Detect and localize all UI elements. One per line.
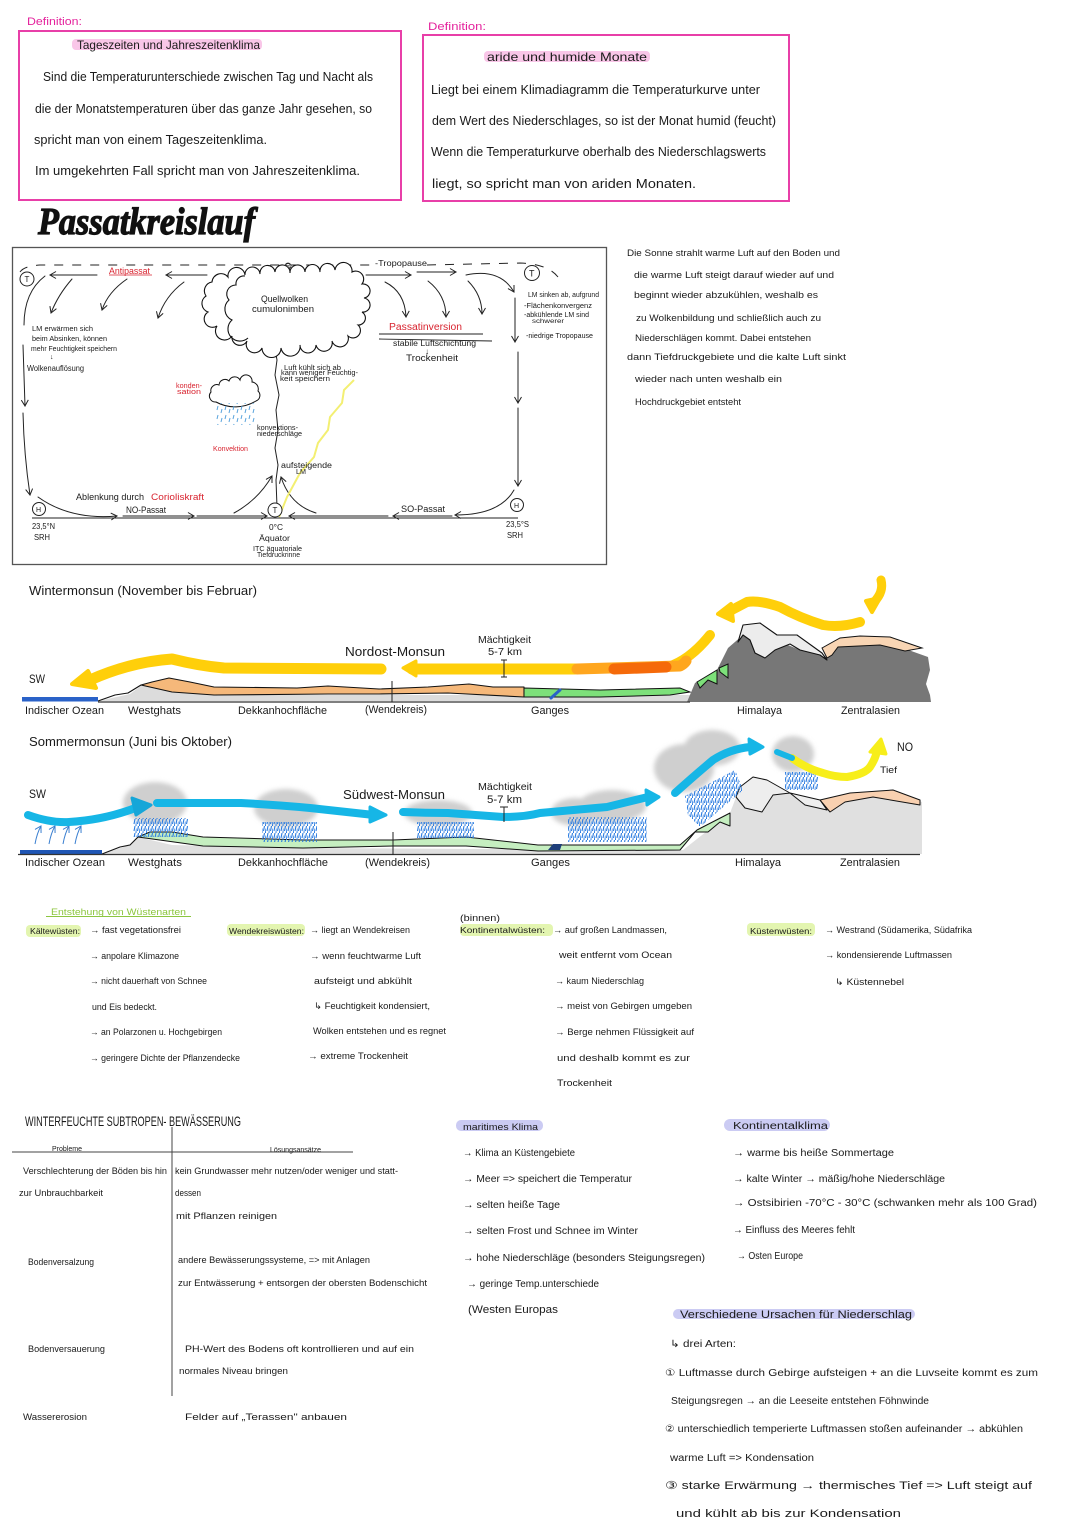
labels: winter places xyxy=(25,704,900,717)
arrow: summer flow centre xyxy=(157,803,386,822)
column: Kontinentalwüsten: → kaum Niederschlag xyxy=(555,976,644,986)
row: Verschlechterung der Böden: Verschlechterung der Böden bis hin xyxy=(23,1166,167,1176)
icon: cumulonimbus cloud: cumulonimben xyxy=(252,304,314,314)
list: maritimes Klima: → selten heiße Tage xyxy=(463,1200,560,1211)
text block: explanation of trade wind circulation: zu Wolkenbildung und schließlich auch zu xyxy=(636,313,821,323)
panel: causes of precipitation xyxy=(665,1309,1038,1520)
row: Bodenversalzung: zur Entwässerung + entsorgen der obersten Bodenschicht xyxy=(178,1278,428,1288)
column: Kältewüsten: → fast vegetationsfrei xyxy=(90,925,181,935)
terrain: Himalaya dark mountains xyxy=(687,623,931,702)
label: Ablenkung durch Corioliskraft: Ablenkung durch xyxy=(76,492,144,502)
label: Mächtigkeit 5-7 km: Mächtigkeit xyxy=(478,782,532,793)
text block: definition right body: dem Wert des Niederschlages, so ist der Monat humid (feucht) xyxy=(432,113,776,128)
title: Passatkreislauf: Passatkreislauf xyxy=(37,201,258,243)
row: Wassererosion: Felder auf „Terassen" anbauen xyxy=(185,1412,347,1422)
text block: explanation of trade wind circulation: Niederschlägen kommt. Dabei entstehen xyxy=(635,333,811,343)
arrows: upper air flow xyxy=(50,272,514,318)
panel: Passatkreislauf diagram xyxy=(12,248,606,564)
label: Äquator: ITC äquatoriale xyxy=(253,546,302,553)
row: Bodenversauerung: PH-Wert des Bodens oft kontrollieren und auf ein xyxy=(185,1344,414,1354)
column headers xyxy=(52,1146,321,1154)
column: Kältewüsten: → an Polarzonen u. Hochgebirgen xyxy=(90,1027,222,1037)
label: Mächtigkeit 5-7 km: 5-7 km xyxy=(488,647,522,658)
terrain: lowland xyxy=(98,678,690,701)
label: Konvektionsniederschläge: konvektions- xyxy=(257,425,299,432)
label: Passatinversion block: Passatinversion xyxy=(389,322,462,333)
list: maritimes Klima: → geringe Temp.unterschiede xyxy=(467,1279,599,1290)
circle T centre: T xyxy=(272,506,278,515)
row: Bodenversalzung xyxy=(28,1255,428,1288)
label: Tropopause: -Tropopause xyxy=(375,259,428,268)
arrows: trade winds at surface xyxy=(38,476,514,517)
label: Kondensation: sation xyxy=(177,389,201,396)
panel: Wintermonsun diagram xyxy=(22,580,931,717)
label: Mächtigkeit 5-7 km xyxy=(478,635,531,677)
text: left air mass note: Wolkenauflösung xyxy=(27,364,84,373)
text: right air mass note: -abkühlende LM sind xyxy=(524,312,589,319)
highlight heading: aride und humide Monate: aride und humide Monate xyxy=(487,50,647,64)
small up arrows from ocean xyxy=(35,826,81,844)
marker: R at top of cloud: R xyxy=(286,264,291,270)
label: Ablenkung durch Corioliskraft: Corioliskraft xyxy=(151,492,205,502)
row: Bodenversauerung xyxy=(28,1344,414,1376)
column: Wendekreiswüsten: → wenn feuchtwarme Luft xyxy=(310,951,422,961)
tick: Wendekreis xyxy=(391,681,393,702)
label: Antipassat: Antipassat xyxy=(109,266,150,276)
list: maritimes Klima: → Klima an Küstengebiete xyxy=(463,1148,575,1159)
column: Kontinentalwüsten: weit entfernt vom Ocean xyxy=(558,950,672,960)
text: right air mass note: -Flächenkonvergenz xyxy=(524,303,593,310)
panel: maritimes Klima xyxy=(456,1120,705,1316)
item 1: Steigungsregen → an die Leeseite entstehen Föhnwinde xyxy=(671,1396,929,1407)
column: Wendekreiswüsten xyxy=(227,924,446,1061)
arrow: upper yellow flow xyxy=(718,580,882,626)
text block: explanation of trade wind circulation xyxy=(627,248,847,407)
heading: Entstehung von Wüstenarten: Entstehung von Wüstenarten xyxy=(51,907,186,917)
row: Bodenversalzung: andere Bewässerungssysteme, => mit Anlagen xyxy=(178,1255,370,1265)
list: Kontinentalklima: → warme bis heiße Sommertage xyxy=(733,1148,894,1159)
text: cooling air note xyxy=(280,365,359,383)
arrow: wavy rising air column xyxy=(275,349,279,507)
item 2 xyxy=(665,1424,1023,1464)
column: Kontinentalwüsten: → Berge nehmen Flüssigkeit auf xyxy=(555,1027,695,1037)
text block: definition left body: Sind die Temperaturunterschiede zwischen Tag und Nacht als xyxy=(43,69,373,84)
label: Mächtigkeit 5-7 km: 5-7 km xyxy=(487,794,522,806)
column: Kontinentalwüsten xyxy=(460,913,695,1088)
terrain: lowland and mountains xyxy=(102,777,922,854)
label: Mächtigkeit 5-7 km xyxy=(478,782,532,822)
label: Äquator: Äquator xyxy=(259,534,290,543)
tropopause dashed line xyxy=(20,263,558,277)
text: right air mass note: LM sinken ab, aufgrund xyxy=(528,292,599,299)
rain streaks xyxy=(133,770,818,842)
column: Kältewüsten: Kältewüsten: xyxy=(30,927,80,936)
labels: winter places: Himalaya xyxy=(737,705,783,717)
label: 23,5 S SRH xyxy=(506,520,529,540)
table rules xyxy=(12,1127,353,1396)
arrow: yellow monsoon to west xyxy=(72,659,381,688)
label: SW: SW xyxy=(29,672,46,686)
row: Bodenversalzung: Bodenversalzung xyxy=(28,1257,94,1267)
list: maritimes Klima: → Meer => speichert die Temperatur xyxy=(463,1174,633,1185)
ground line xyxy=(18,854,920,856)
ground line xyxy=(98,701,690,703)
circle H right xyxy=(510,498,524,512)
labels: summer places: Zentralasien xyxy=(840,857,900,869)
column: Küstenwüsten: → kondensierende Luftmassen xyxy=(825,950,952,960)
row: Verschlechterung der Böden: dessen xyxy=(175,1188,201,1198)
label: Passatinversion block: Trockenheit xyxy=(406,353,459,363)
icon: small rain cloud xyxy=(209,375,260,425)
heading: Sommermonsun: Sommermonsun (Juni bis Oktober) xyxy=(29,734,232,749)
labels: summer places xyxy=(25,857,900,869)
item 3 xyxy=(665,1480,1033,1520)
labels: summer places: Ganges xyxy=(531,857,571,869)
column: Wendekreiswüsten: → extreme Trockenheit xyxy=(308,1051,409,1061)
label: 23,5 S SRH: 23,5°S xyxy=(506,520,529,529)
column headers: Probleme xyxy=(52,1146,82,1153)
label: SW: SW xyxy=(29,787,47,801)
row: Bodenversauerung: normales Niveau bringen xyxy=(179,1366,288,1376)
text block: definition right body: Liegt bei einem Klimadiagramm die Temperaturkurve unter xyxy=(431,82,761,97)
arrows: descending air left xyxy=(23,276,45,495)
list: Kontinentalklima: → Ostsibirien -70°C - 30°C (schwanken mehr als 100 Grad) xyxy=(733,1198,1037,1209)
circle H right: H xyxy=(514,503,519,510)
label: 23,5 N SRH: 23,5°N xyxy=(32,522,55,531)
label: Konvektionsniederschläge xyxy=(257,425,302,438)
text block: explanation of trade wind circulation: die warme Luft steigt darauf wieder auf und xyxy=(634,270,834,280)
label: NO: NO xyxy=(897,740,913,754)
label: aufsteigende LM: LM xyxy=(296,469,306,476)
text: left air mass note: beim Absinken, können xyxy=(32,336,107,343)
icon: cumulonimbus cloud: Quellwolken xyxy=(261,294,308,304)
heading: Wintermonsun: Wintermonsun (November bis Februar) xyxy=(29,583,257,598)
label: 23,5 S SRH: SRH xyxy=(507,531,523,540)
panel: Kontinentalklima xyxy=(724,1119,1037,1262)
icons: grey rain clouds xyxy=(123,730,814,827)
text block: definition right body: Wenn die Temperaturkurve oberhalb des Niederschlagswerts xyxy=(431,144,766,159)
label: Passatinversion block: stabile Luftschichtung xyxy=(393,339,476,348)
label: SO-Passat: SO-Passat xyxy=(401,504,446,514)
column: Kontinentalwüsten: Trockenheit xyxy=(557,1078,613,1088)
row: Bodenversauerung: Bodenversauerung xyxy=(28,1344,105,1354)
text block: definition right body xyxy=(431,82,776,191)
column: Küstenwüsten: ↳ Küstennebel xyxy=(835,977,904,987)
panel: desert types xyxy=(26,907,972,1088)
tick: Wendekreis xyxy=(392,832,394,855)
column: Küstenwüsten: Küstenwüsten: xyxy=(750,927,812,936)
text block: definition left body: Im umgekehrten Fall spricht man von Jahreszeitenklima. xyxy=(35,163,360,178)
list: maritimes Klima: (Westen Europas xyxy=(468,1304,559,1316)
label: Kondensation: konden- xyxy=(176,383,203,390)
highlight heading: maritimes Klima: maritimes Klima xyxy=(463,1122,538,1132)
highlight heading: Kontinentalklima: Kontinentalklima xyxy=(733,1121,829,1132)
text: left air mass note: ↓ xyxy=(50,354,54,361)
text block: explanation of trade wind circulation: wieder nach unten weshalb ein xyxy=(634,374,782,384)
label: Südwest-Monsun: Südwest-Monsun xyxy=(343,787,445,802)
item 2: warme Luft => Kondensation xyxy=(669,1453,814,1464)
row: Verschlechterung der Böden: kein Grundwasser mehr nutzen/oder weniger und statt- xyxy=(175,1166,398,1176)
text block: explanation of trade wind circulation: dann Tiefdruckgebiete und die kalte Luft sinkt xyxy=(627,352,847,362)
list: Kontinentalklima xyxy=(733,1148,1037,1262)
label: definition right: Definition: xyxy=(428,21,486,33)
label: Äquator xyxy=(253,523,302,559)
column: Kontinentalwüsten: Kontinentalwüsten: xyxy=(460,926,545,935)
item 1 xyxy=(665,1368,1038,1407)
heading: Winterfeuchte Subtropen: WINTERFEUCHTE SUBTROPEN- BEWÄSSERUNG xyxy=(25,1113,241,1129)
column: Kältewüsten: → geringere Dichte der Pflanzendecke xyxy=(90,1053,240,1063)
list: maritimes Klima xyxy=(463,1148,705,1316)
panel: definition day/season climate xyxy=(19,16,401,200)
label: Äquator: Tiefdruckrinne xyxy=(257,552,300,559)
labels: winter places: Zentralasien xyxy=(841,705,900,717)
text block: explanation of trade wind circulation: Hochdruckgebiet entsteht xyxy=(635,397,742,407)
label: 23,5 N SRH: SRH xyxy=(34,533,50,542)
ground line xyxy=(32,517,518,519)
list: Kontinentalklima: → Einfluss des Meeres fehlt xyxy=(733,1225,855,1236)
icon: cumulonimbus cloud xyxy=(202,262,370,358)
column: Wendekreiswüsten: Wolken entstehen und es regnet xyxy=(313,1026,446,1036)
row: Wassererosion: Wassererosion xyxy=(23,1412,87,1422)
label: aufsteigende LM xyxy=(281,461,333,476)
column: Kältewüsten: → nicht dauerhaft von Schnee xyxy=(90,976,207,986)
labels: summer places: Dekkanhochfläche xyxy=(238,857,328,869)
ocean xyxy=(22,697,98,702)
column: Kontinentalwüsten: → meist von Gebirgen umgeben xyxy=(555,1001,692,1011)
label: 23,5 N SRH xyxy=(32,522,55,542)
label: Passatinversion block: ↓ xyxy=(425,347,429,356)
label: Konvektion: Konvektion xyxy=(213,446,248,453)
row: Verschlechterung der Böden xyxy=(19,1166,398,1221)
label: Kondensation xyxy=(176,383,203,396)
panel: winter-humid subtropics irrigation table xyxy=(12,1113,428,1422)
column: Wendekreiswüsten: → liegt an Wendekreisen xyxy=(310,925,410,935)
circle T left xyxy=(20,272,34,286)
column: Kontinentalwüsten: (binnen) xyxy=(460,913,500,923)
item 3: ③ starke Erwärmung → thermisches Tief => Luft steigt auf xyxy=(665,1480,1033,1492)
column: Kältewüsten: und Eis bedeckt. xyxy=(92,1002,157,1012)
item 2: ② unterschiedlich temperierte Luftmassen stoßen aufeinander → abkühlen xyxy=(665,1424,1023,1435)
column: Kontinentalwüsten: und deshalb kommt es zur xyxy=(557,1053,690,1063)
labels: summer places: Westghats xyxy=(128,857,183,869)
list: Kontinentalklima: → Osten Europe xyxy=(737,1251,803,1262)
circle T right: T xyxy=(529,268,535,278)
text block: definition right body: liegt, so spricht man von ariden Monaten. xyxy=(432,176,696,191)
text: right air mass note: -niedrige Tropopause xyxy=(526,333,593,340)
row: Verschlechterung der Böden: zur Unbrauchbarkeit xyxy=(19,1188,104,1198)
circle T left: T xyxy=(24,275,30,284)
label: Äquator: 0°C xyxy=(269,523,283,532)
marker: R at top of cloud xyxy=(285,263,291,270)
highlight heading: Tageszeiten und Jahreszeitenklima: Tageszeiten und Jahreszeitenklima xyxy=(77,38,260,52)
highlight heading: Verschiedene Ursachen für Niederschlag: Verschiedene Ursachen für Niederschlag xyxy=(680,1309,912,1321)
labels: summer places: (Wendekreis) xyxy=(365,857,430,869)
circle H left xyxy=(32,502,46,516)
text: cooling air note: Luft kühlt sich ab xyxy=(284,365,341,372)
column: Kältewüsten: → anpolare Klimazone xyxy=(90,951,179,961)
circle H left: H xyxy=(36,507,41,514)
row: Verschlechterung der Böden: mit Pflanzen reinigen xyxy=(176,1211,277,1221)
column: Kältewüsten xyxy=(26,925,240,1063)
text block: explanation of trade wind circulation: Die Sonne strahlt warme Luft auf den Boden und xyxy=(627,248,840,258)
panel: Sommermonsun diagram xyxy=(18,730,922,869)
column: Wendekreiswüsten: aufsteigt und abkühlt xyxy=(314,976,413,986)
item 3: und kühlt ab bis zur Kondensation xyxy=(676,1508,901,1520)
text block: explanation of trade wind circulation: beginnt wieder abzukühlen, weshalb es xyxy=(634,290,819,300)
label: aufsteigende LM: aufsteigende xyxy=(281,461,333,470)
arrows: descending air right xyxy=(515,298,518,486)
item 1: ① Luftmasse durch Gebirge aufsteigen + an die Luvseite kommt es zum xyxy=(665,1368,1038,1379)
label: Konvektionsniederschläge: niederschläge xyxy=(257,431,302,438)
circle T centre xyxy=(268,503,282,517)
circle T right xyxy=(524,266,540,280)
arrow: yellow orange monsoon from Himalaya xyxy=(403,635,710,676)
arrow: summer flow east xyxy=(403,790,659,817)
column: Wendekreiswüsten: Wendekreiswüsten: xyxy=(229,927,304,936)
text block: definition left body: spricht man von einem Tageszeitenklima. xyxy=(34,132,267,147)
yellow rising line xyxy=(279,380,354,517)
diagram frame xyxy=(12,248,606,564)
labels: summer places: Himalaya xyxy=(735,857,782,869)
list: maritimes Klima: → selten Frost und Schnee im Winter xyxy=(463,1226,639,1237)
box: definition left xyxy=(19,31,401,200)
labels: winter places: (Wendekreis) xyxy=(365,704,427,716)
box: definition right xyxy=(423,35,789,201)
label: Mächtigkeit 5-7 km: Mächtigkeit xyxy=(478,635,531,646)
list: maritimes Klima: → hohe Niederschläge (besonders Steigungsregen) xyxy=(463,1253,705,1264)
highlight heading: Kontinentalklima xyxy=(724,1119,830,1132)
text: right air mass note: schwerer xyxy=(532,319,564,325)
highlight heading: maritimes Klima xyxy=(456,1120,543,1132)
text block: definition left body xyxy=(34,69,373,178)
text: cooling air note: keit speichern xyxy=(280,376,330,383)
text block: definition left body: die der Monatstemperaturen über das ganze Jahr gesehen, so xyxy=(35,101,372,116)
label: definition left: Definition: xyxy=(27,16,82,28)
row: Wassererosion xyxy=(23,1412,347,1422)
labels: winter places: Ganges xyxy=(531,705,569,717)
column: Küstenwüsten xyxy=(747,923,972,987)
text: left air mass note xyxy=(27,326,117,373)
label: Ablenkung durch Corioliskraft xyxy=(76,492,205,502)
column headers: Lösungsansätze xyxy=(270,1147,321,1154)
column: Wendekreiswüsten: ↳ Feuchtigkeit kondensiert, xyxy=(314,1001,430,1011)
text: left air mass note: mehr Feuchtigkeit speichern xyxy=(31,346,117,353)
label: Tief: Tief xyxy=(880,765,898,775)
labels: summer places: Indischer Ozean xyxy=(25,857,105,869)
arrow: cyan to yellow flow north-east xyxy=(777,739,886,777)
arrow: summer flow west xyxy=(28,798,151,822)
label: NO-Passat: NO-Passat xyxy=(126,505,166,515)
text: cooling air note: kann weniger Feuchtig- xyxy=(281,370,359,377)
list: Kontinentalklima: → kalte Winter → mäßig/hohe Niederschläge xyxy=(733,1174,945,1185)
text: drei Arten: ↳ drei Arten: xyxy=(670,1339,736,1350)
column: Kontinentalwüsten: → auf großen Landmassen, xyxy=(553,925,667,935)
column: Küstenwüsten: → Westrand (Südamerika, Südafrika xyxy=(825,925,972,935)
labels: winter places: Dekkanhochfläche xyxy=(238,705,327,717)
label: Passatinversion block xyxy=(379,322,492,363)
text: left air mass note: LM erwärmen sich xyxy=(32,326,93,333)
labels: winter places: Indischer Ozean xyxy=(25,705,104,717)
arrow: summer flow up the Himalaya xyxy=(675,739,763,793)
label: Nordost-Monsun: Nordost-Monsun xyxy=(345,644,445,659)
text: right air mass note xyxy=(524,292,599,340)
panel: definition arid and humid months xyxy=(423,21,789,201)
labels: winter places: Westghats xyxy=(128,705,181,717)
ocean xyxy=(20,850,102,854)
